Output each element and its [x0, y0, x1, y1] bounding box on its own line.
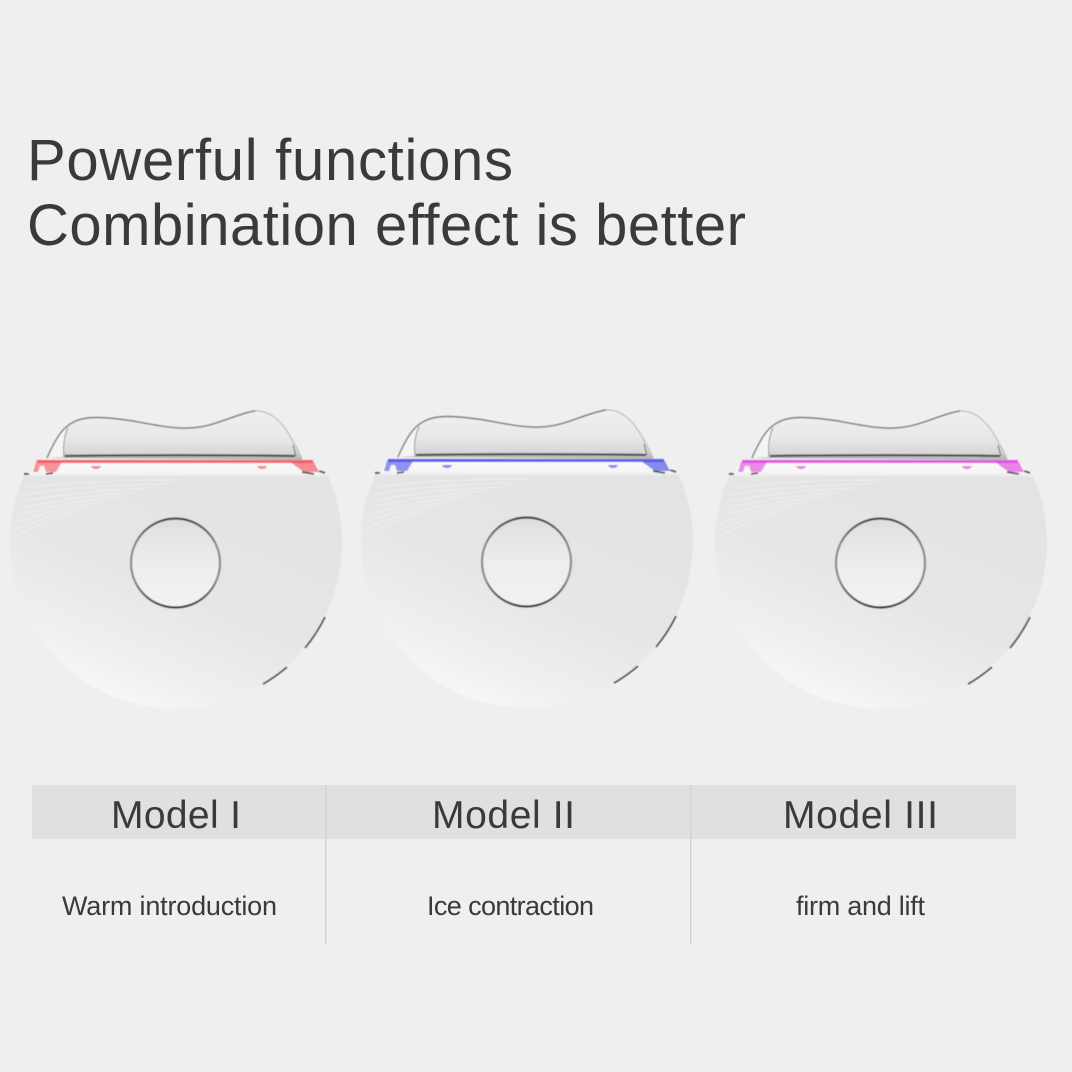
- heading: Model III: Model III: [783, 794, 938, 837]
- table header band: [32, 785, 1016, 839]
- text: Warm introduction: Warm introduction: [62, 891, 277, 921]
- text: firm and lift: firm and lift: [796, 891, 925, 921]
- device: Model I with red light: [10, 411, 342, 709]
- heading: Model I: Model I: [111, 794, 241, 837]
- table: model comparison: [32, 785, 1016, 944]
- column divider 2: [690, 785, 691, 944]
- title: Combination effect is better: [27, 193, 746, 258]
- title: [27, 128, 746, 258]
- device: Model III with magenta light: [715, 411, 1047, 709]
- text: Ice contraction: Ice contraction: [427, 891, 594, 921]
- heading: Model II: Model II: [432, 794, 575, 837]
- title: Powerful functions: [27, 128, 513, 193]
- column divider 1: [325, 785, 326, 944]
- device: Model II with blue light: [361, 410, 693, 708]
